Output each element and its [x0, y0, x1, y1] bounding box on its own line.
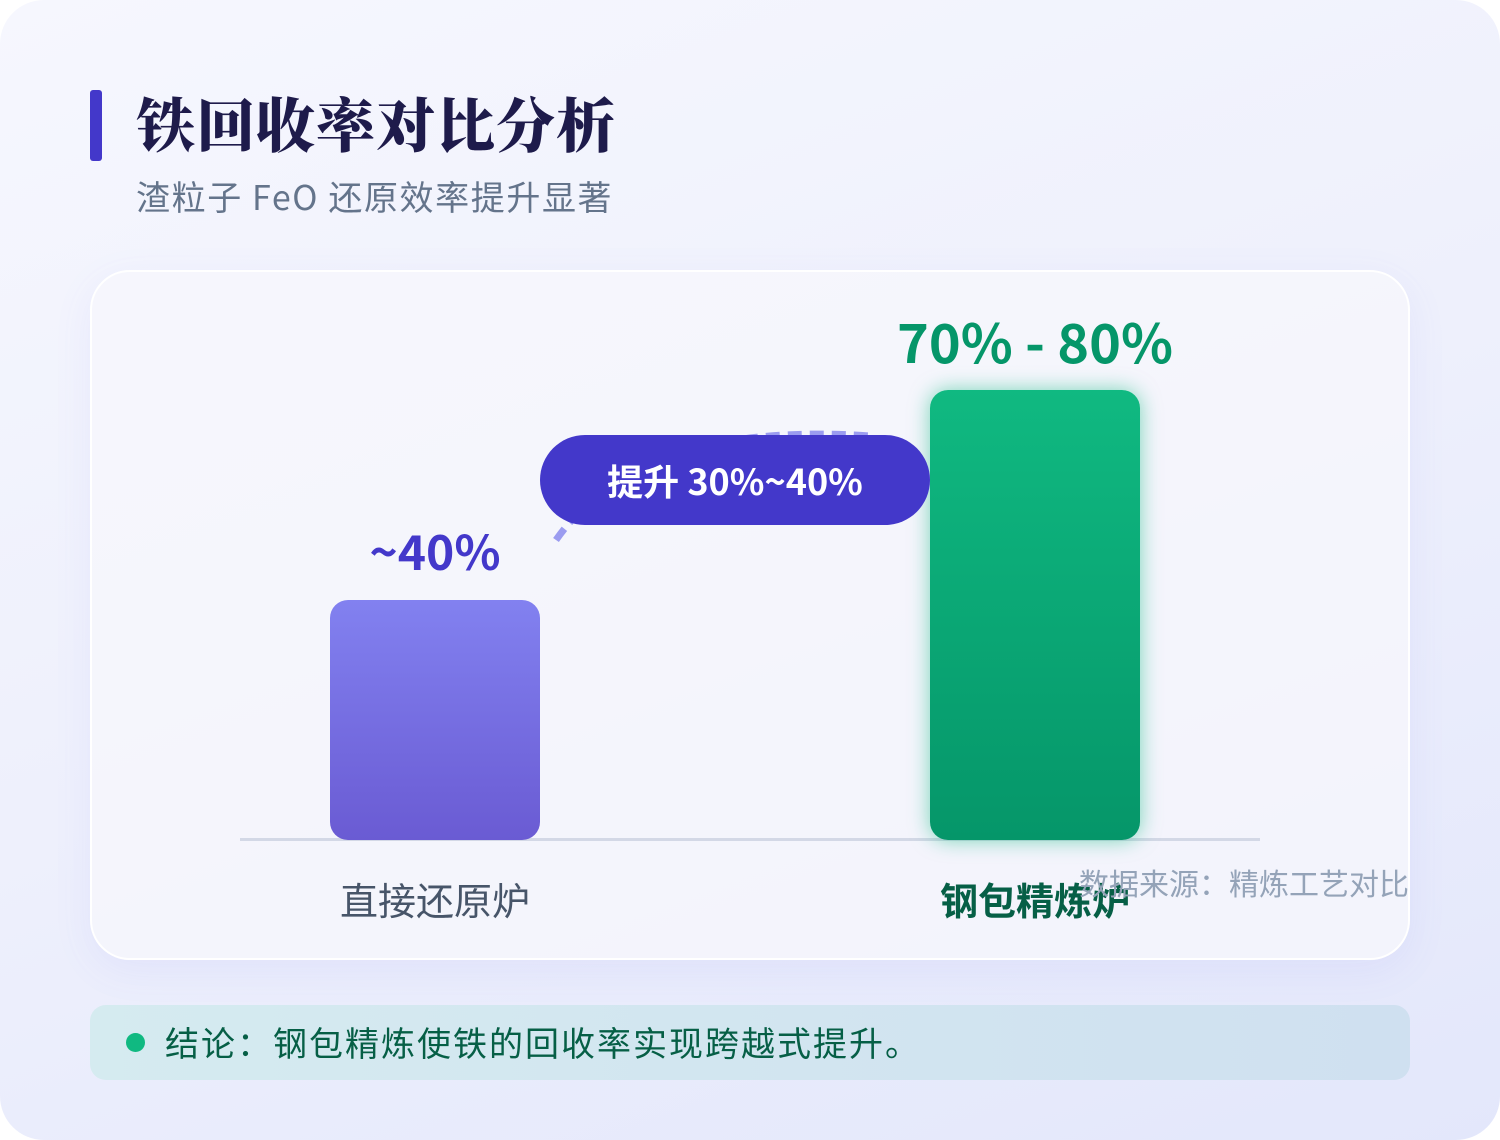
conclusion box	[90, 1005, 1410, 1080]
category label: ladle refining: 钢包精炼炉	[940, 871, 1130, 926]
conclusion dot	[126, 1033, 145, 1052]
conclusion text: 结论：钢包精炼使铁的回收率实现跨越式提升。	[165, 1017, 921, 1066]
subtitle: 渣粒子 FeO 还原效率提升显著	[136, 171, 613, 220]
title accent bar	[90, 90, 102, 161]
panel: chart card	[90, 270, 1410, 960]
baseline	[240, 838, 1260, 841]
category label: direct reduction: 直接还原炉	[340, 871, 530, 926]
data source: 数据来源：精炼工艺对比	[1079, 860, 1409, 904]
bar: direct reduction furnace	[330, 600, 540, 840]
value label 70%-80%: 70% - 80%	[897, 300, 1173, 379]
title: 铁回收率对比分析	[136, 79, 616, 164]
bar: ladle refining furnace	[930, 390, 1140, 840]
callout pill	[540, 435, 930, 525]
value label ~40%: ~40%	[369, 514, 501, 584]
callout pill: 提升 30%~40%	[607, 454, 863, 506]
